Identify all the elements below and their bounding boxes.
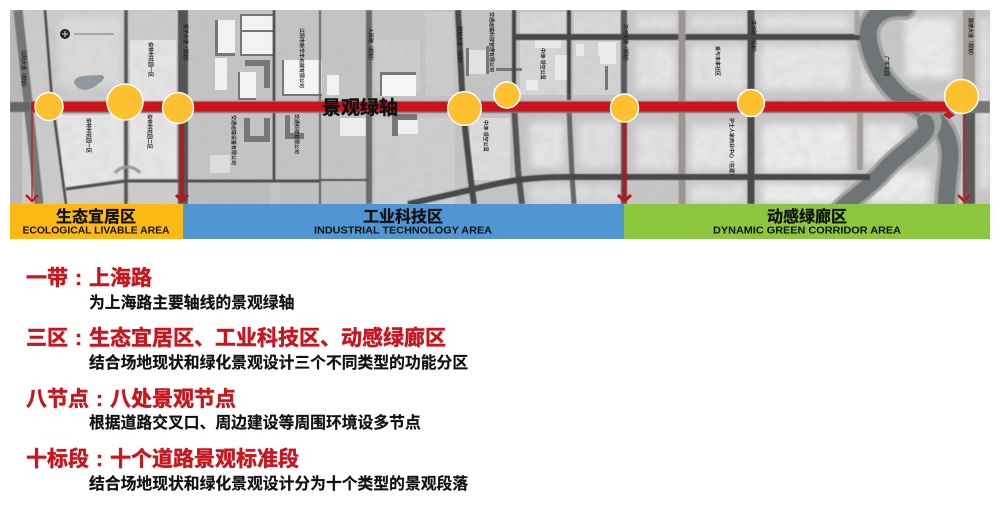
road network: [10, 10, 990, 204]
road labels: 规划大道（规划）: [456, 26, 463, 66]
map panel: [10, 10, 990, 239]
text: ten sections description: 结合场地现状和绿化景观设计分为十个类型的景观段落: [89, 471, 468, 494]
river: [840, 8, 950, 210]
road labels: 护士人家商业中心（在建）: [728, 118, 735, 178]
road labels: 中津·领空公寓: [482, 120, 489, 152]
landscape nodes: [35, 80, 978, 125]
road labels: 鼓楼大道（规划）: [967, 18, 974, 58]
heading: three zones: :: [75, 327, 82, 350]
road labels: 爱与未来社区: [714, 46, 721, 76]
heading: ten sections: 十标段 十个道路景观标准段: [26, 443, 299, 473]
road labels: 交通运输设备有限公司: [230, 115, 237, 165]
arrow: industrial to green boundary: [618, 120, 631, 201]
zone: ecological livable: ECOLOGICAL LIVABLE AREA: [22, 224, 170, 236]
zone: industrial technology: INDUSTRIAL TECHNOLOGY AREA: [314, 224, 492, 236]
road labels: 江阴大道（规划）: [20, 50, 27, 90]
road labels: 广东花园: [883, 56, 890, 76]
text: eight nodes description: 根据道路交叉口、周边建设等周围环境设多节点: [89, 410, 421, 433]
road labels: 中津·领空公寓: [539, 48, 546, 80]
heading: three zones: 三区 生态宜居区、工业科技区、动感绿廊区: [26, 322, 446, 352]
axis label: 景观绿轴: [322, 93, 398, 120]
zone: dynamic green corridor: DYNAMIC GREEN CORRIDOR AREA: [713, 224, 901, 236]
road labels: [20, 12, 974, 178]
noise texture: [106, 26, 930, 198]
arrow: ecological to industrial boundary: [176, 120, 188, 201]
light land blocks: [60, 14, 990, 204]
aerial base map: [10, 8, 990, 210]
diamond end: [943, 111, 955, 119]
arrow: ecological area left boundary: [26, 112, 38, 201]
road labels: 江阴市新华丰机械有限公司: [298, 28, 305, 88]
heading: eight nodes: 八节点 八处景观节点: [26, 383, 236, 413]
road labels: 伯特利花园二区: [146, 114, 153, 149]
residential blocks: [57, 115, 123, 188]
zone: dynamic green corridor: [624, 203, 990, 239]
factory buildings: [210, 14, 616, 173]
pond: [74, 75, 104, 90]
arrow: green area right boundary: [958, 115, 970, 201]
text: three zones description: 结合场地现状和绿化景观设计三个不同类型的功能分区: [89, 350, 468, 373]
road labels: 交通科技有限公司: [293, 114, 300, 154]
zone: ecological livable: 生态宜居区: [56, 203, 136, 227]
zone: dynamic green corridor: 动感绿廊区: [767, 203, 847, 227]
road labels: 伯特利花园一区: [85, 118, 92, 153]
road labels: 汉河大道（规划）: [622, 24, 629, 64]
compass icon: [60, 29, 114, 39]
main axis red band: [31, 102, 949, 112]
road labels: 交通运输科技管理有限公司: [488, 12, 495, 72]
heading: one belt: :: [75, 267, 82, 290]
heading: eight nodes: :: [96, 388, 103, 411]
zone: ecological livable: [10, 203, 183, 239]
zone: industrial technology: [183, 203, 624, 239]
road labels: 人民路（规划）: [367, 28, 374, 63]
zone: industrial technology: 工业科技区: [363, 203, 443, 227]
text: one belt description: 为上海路主要轴线的景观绿轴: [89, 290, 294, 313]
heading: ten sections: :: [96, 448, 103, 471]
road labels: 贺子大道（规划）: [182, 24, 189, 64]
heading: one belt: 一带 上海路: [26, 262, 152, 292]
road labels: 滨河路（规划）: [750, 20, 757, 55]
road labels: 伯特利花园一区: [147, 42, 154, 77]
